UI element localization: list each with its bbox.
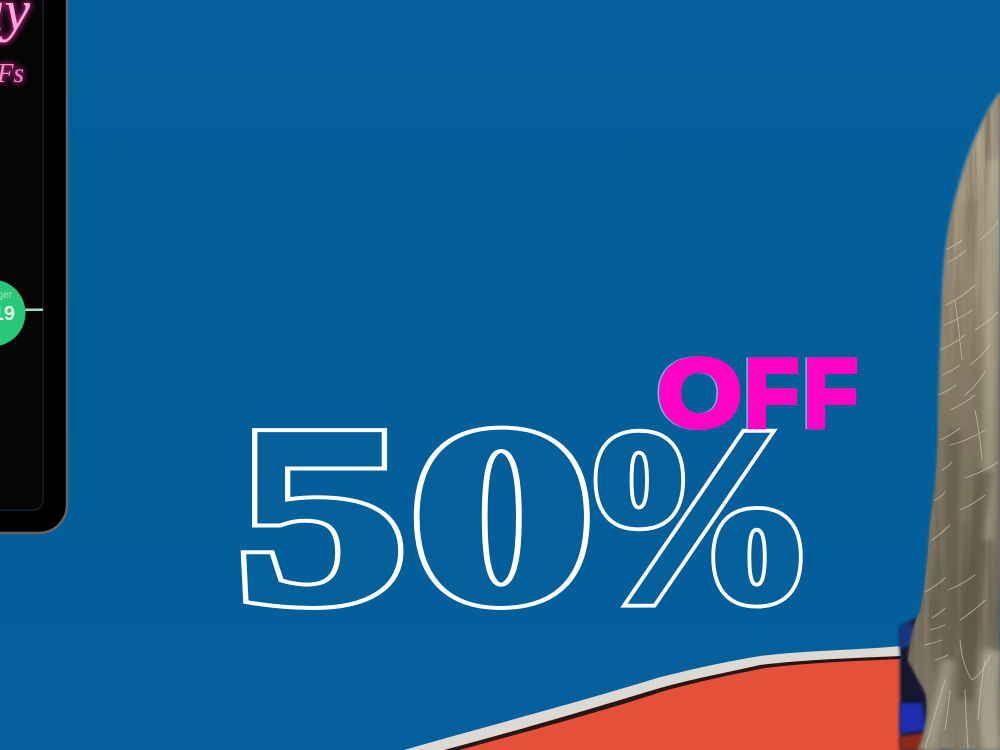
label: OFF: F — [802, 340, 856, 447]
orange wave shape — [404, 646, 901, 750]
label: OFF: F — [743, 340, 797, 447]
neon script lettering — [0, 0, 30, 88]
hair strands — [925, 222, 998, 748]
label: OFF: F — [804, 340, 858, 447]
photo: woman with blonde hair — [900, 80, 1000, 750]
headline: 50%: % — [576, 381, 818, 651]
label: OFF: O — [658, 339, 742, 447]
headline: 50%: 0 — [411, 376, 593, 655]
knitted blue garment — [900, 618, 960, 750]
connector line — [24, 308, 43, 311]
label: OFF: O — [656, 339, 740, 447]
inner screen panel — [0, 0, 43, 510]
headline: 50%: 5 — [238, 378, 406, 655]
headline: 50%: 0 — [411, 376, 593, 655]
green price badge — [0, 280, 26, 346]
headline: 50% — [238, 376, 818, 655]
hair mass — [908, 92, 1000, 750]
label: OFF — [656, 339, 858, 447]
hair texture — [900, 80, 1000, 750]
headline: 50%: 5 — [238, 378, 406, 655]
device mockup — [0, 0, 67, 533]
label: OFF: F — [745, 340, 799, 447]
headline: 50%: % — [576, 381, 818, 651]
